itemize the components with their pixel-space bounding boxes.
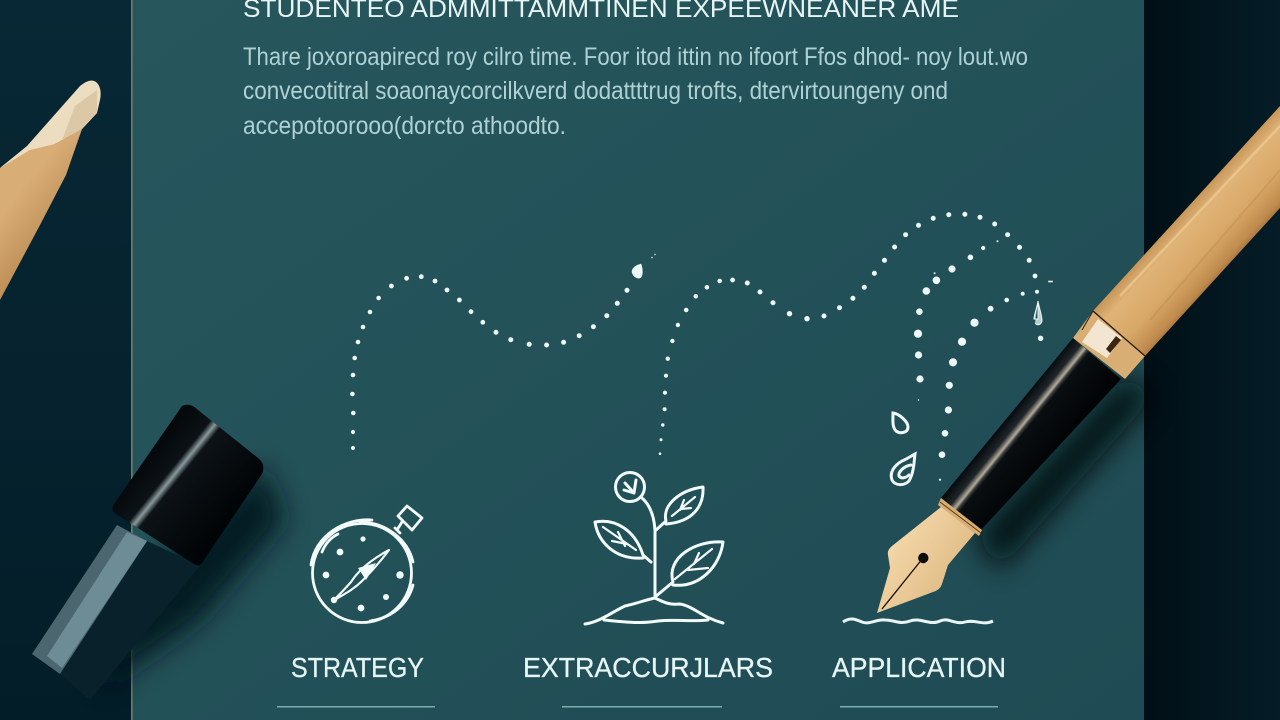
panel: teal page	[131, 0, 1144, 720]
shadow: pen	[975, 375, 1155, 570]
label: strategy: STRATEGY	[291, 652, 424, 683]
label: application: APPLICATION	[832, 652, 1006, 683]
pen band (gold)	[1073, 311, 1145, 379]
illustration: pencil	[0, 80, 101, 300]
text block: intro paragraph: convecotitral soaonaycorcilkverd dodattttrug trofts, dtervirtoungeny ond	[243, 77, 948, 105]
icon: plant	[585, 472, 723, 624]
background: right desk	[1144, 0, 1280, 720]
divider: extracurriculars	[562, 706, 722, 708]
pen barrel (wood)	[1093, 106, 1280, 356]
shadow: ink bottle	[100, 465, 285, 690]
chart: dotted path two	[659, 212, 1052, 455]
text block: intro paragraph	[243, 43, 1028, 140]
chart: dotted path one	[350, 254, 655, 450]
illustration: fountain pen	[877, 106, 1280, 613]
background: left desk	[0, 0, 132, 720]
label: extracurriculars: EXTRACCURJLARS	[523, 652, 773, 683]
icon: ink drop small	[893, 413, 908, 433]
text block: intro paragraph: Thare joxoroapirecd roy cilro time. Foor itod ittin no ifoort Ffos dhod- noy lout.wo	[243, 43, 1028, 71]
divider: application	[840, 706, 998, 708]
divider: strategy	[277, 706, 435, 708]
icon: writing wave line	[843, 619, 993, 623]
icon: ink drop large	[891, 454, 915, 485]
chart: dotted path four	[939, 292, 1024, 481]
pen grip (black)	[941, 338, 1121, 531]
illustration: ink bottle	[32, 405, 263, 700]
text block: intro paragraph: accepotoorooo(dorcto athoodto.	[243, 112, 566, 140]
icon: compass	[311, 506, 422, 622]
pen nib	[877, 507, 975, 613]
pen collar (gold)	[938, 498, 982, 536]
chart: dotted path three	[914, 241, 998, 400]
